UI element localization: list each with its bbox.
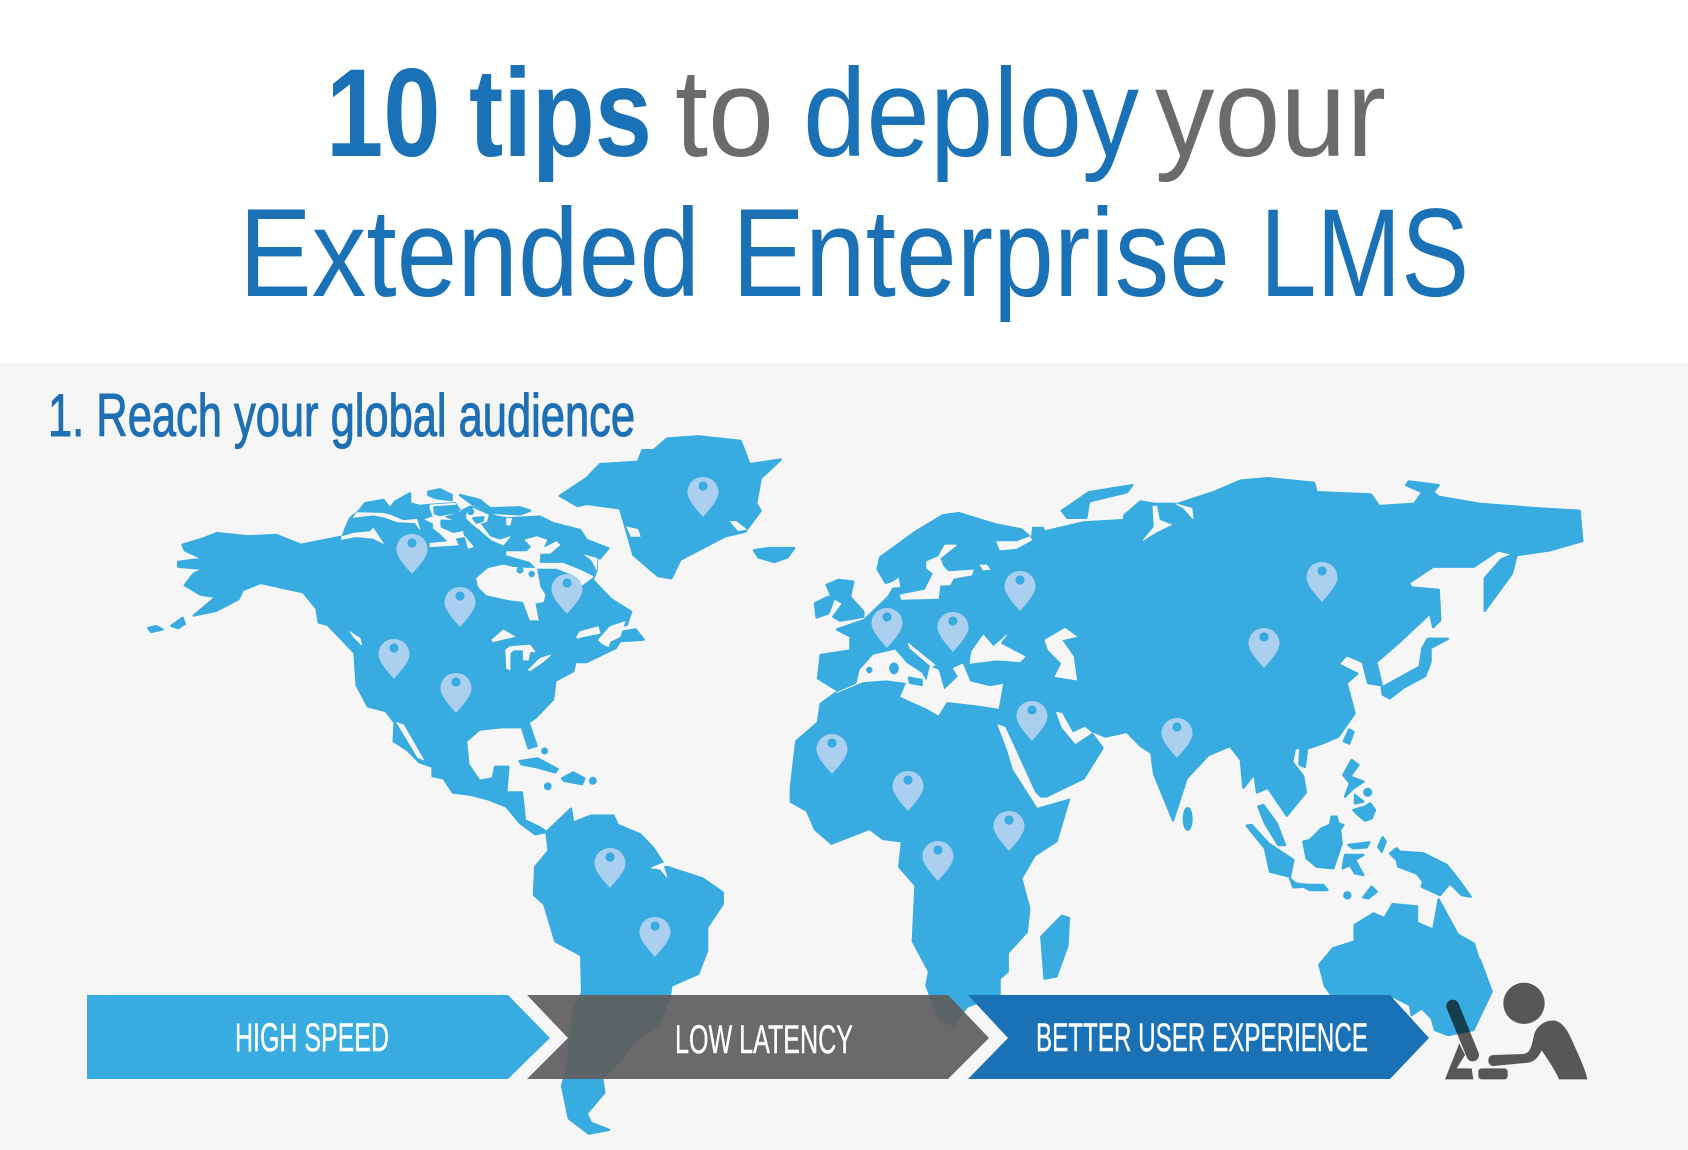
americas and greenland xyxy=(148,436,794,1134)
arrow: better user experience: BETTER USER EXPERIENCE xyxy=(1036,1016,1368,1060)
arrow: low latency: LOW LATENCY xyxy=(675,1018,853,1062)
pin: China xyxy=(1248,628,1280,668)
world map xyxy=(148,436,1582,1134)
arrow: high speed: HIGH SPEED xyxy=(235,1016,389,1060)
eurasia, africa, australia xyxy=(791,478,1582,1025)
pin: eastern Europe xyxy=(938,612,968,652)
pin: France xyxy=(872,608,902,648)
europe detail xyxy=(815,537,1077,715)
pin: West Africa xyxy=(816,734,848,774)
pin: northern Canada xyxy=(396,534,428,574)
arrow: low latency xyxy=(527,995,989,1079)
pin: Greenland xyxy=(688,477,718,517)
arrow: high speed xyxy=(87,995,550,1079)
pin: central Canada xyxy=(444,587,476,627)
south-east asia islands xyxy=(1247,760,1471,898)
pin: India xyxy=(1162,718,1192,758)
pin: central USA xyxy=(440,673,472,713)
arrow: better user experience xyxy=(968,995,1429,1079)
title: to xyxy=(675,44,774,183)
pin: Quebec xyxy=(552,574,582,614)
title: Enterprise xyxy=(732,184,1230,323)
location pins xyxy=(378,477,1338,957)
section heading: 1. Reach your global audience xyxy=(48,382,635,449)
canadian arctic and lakes xyxy=(342,489,625,671)
title: 10 tips xyxy=(326,44,652,183)
pin: southern Brazil xyxy=(640,917,670,957)
pin: northern Brazil xyxy=(594,848,626,888)
icon: person at computer xyxy=(1445,983,1587,1079)
south-east australia xyxy=(1360,960,1492,1035)
pin: Russia west xyxy=(1004,571,1036,611)
title: LMS xyxy=(1260,184,1469,323)
pin: Congo xyxy=(922,841,954,881)
pin: Siberia xyxy=(1306,562,1338,602)
title: your xyxy=(1155,44,1386,183)
title: deploy xyxy=(803,44,1139,183)
title xyxy=(239,44,1469,323)
pin: western USA xyxy=(378,639,410,679)
pin: East Africa xyxy=(994,811,1024,851)
pin: Middle East xyxy=(1016,701,1048,741)
title: Extended xyxy=(239,184,700,323)
pin: Central Africa xyxy=(892,771,924,811)
